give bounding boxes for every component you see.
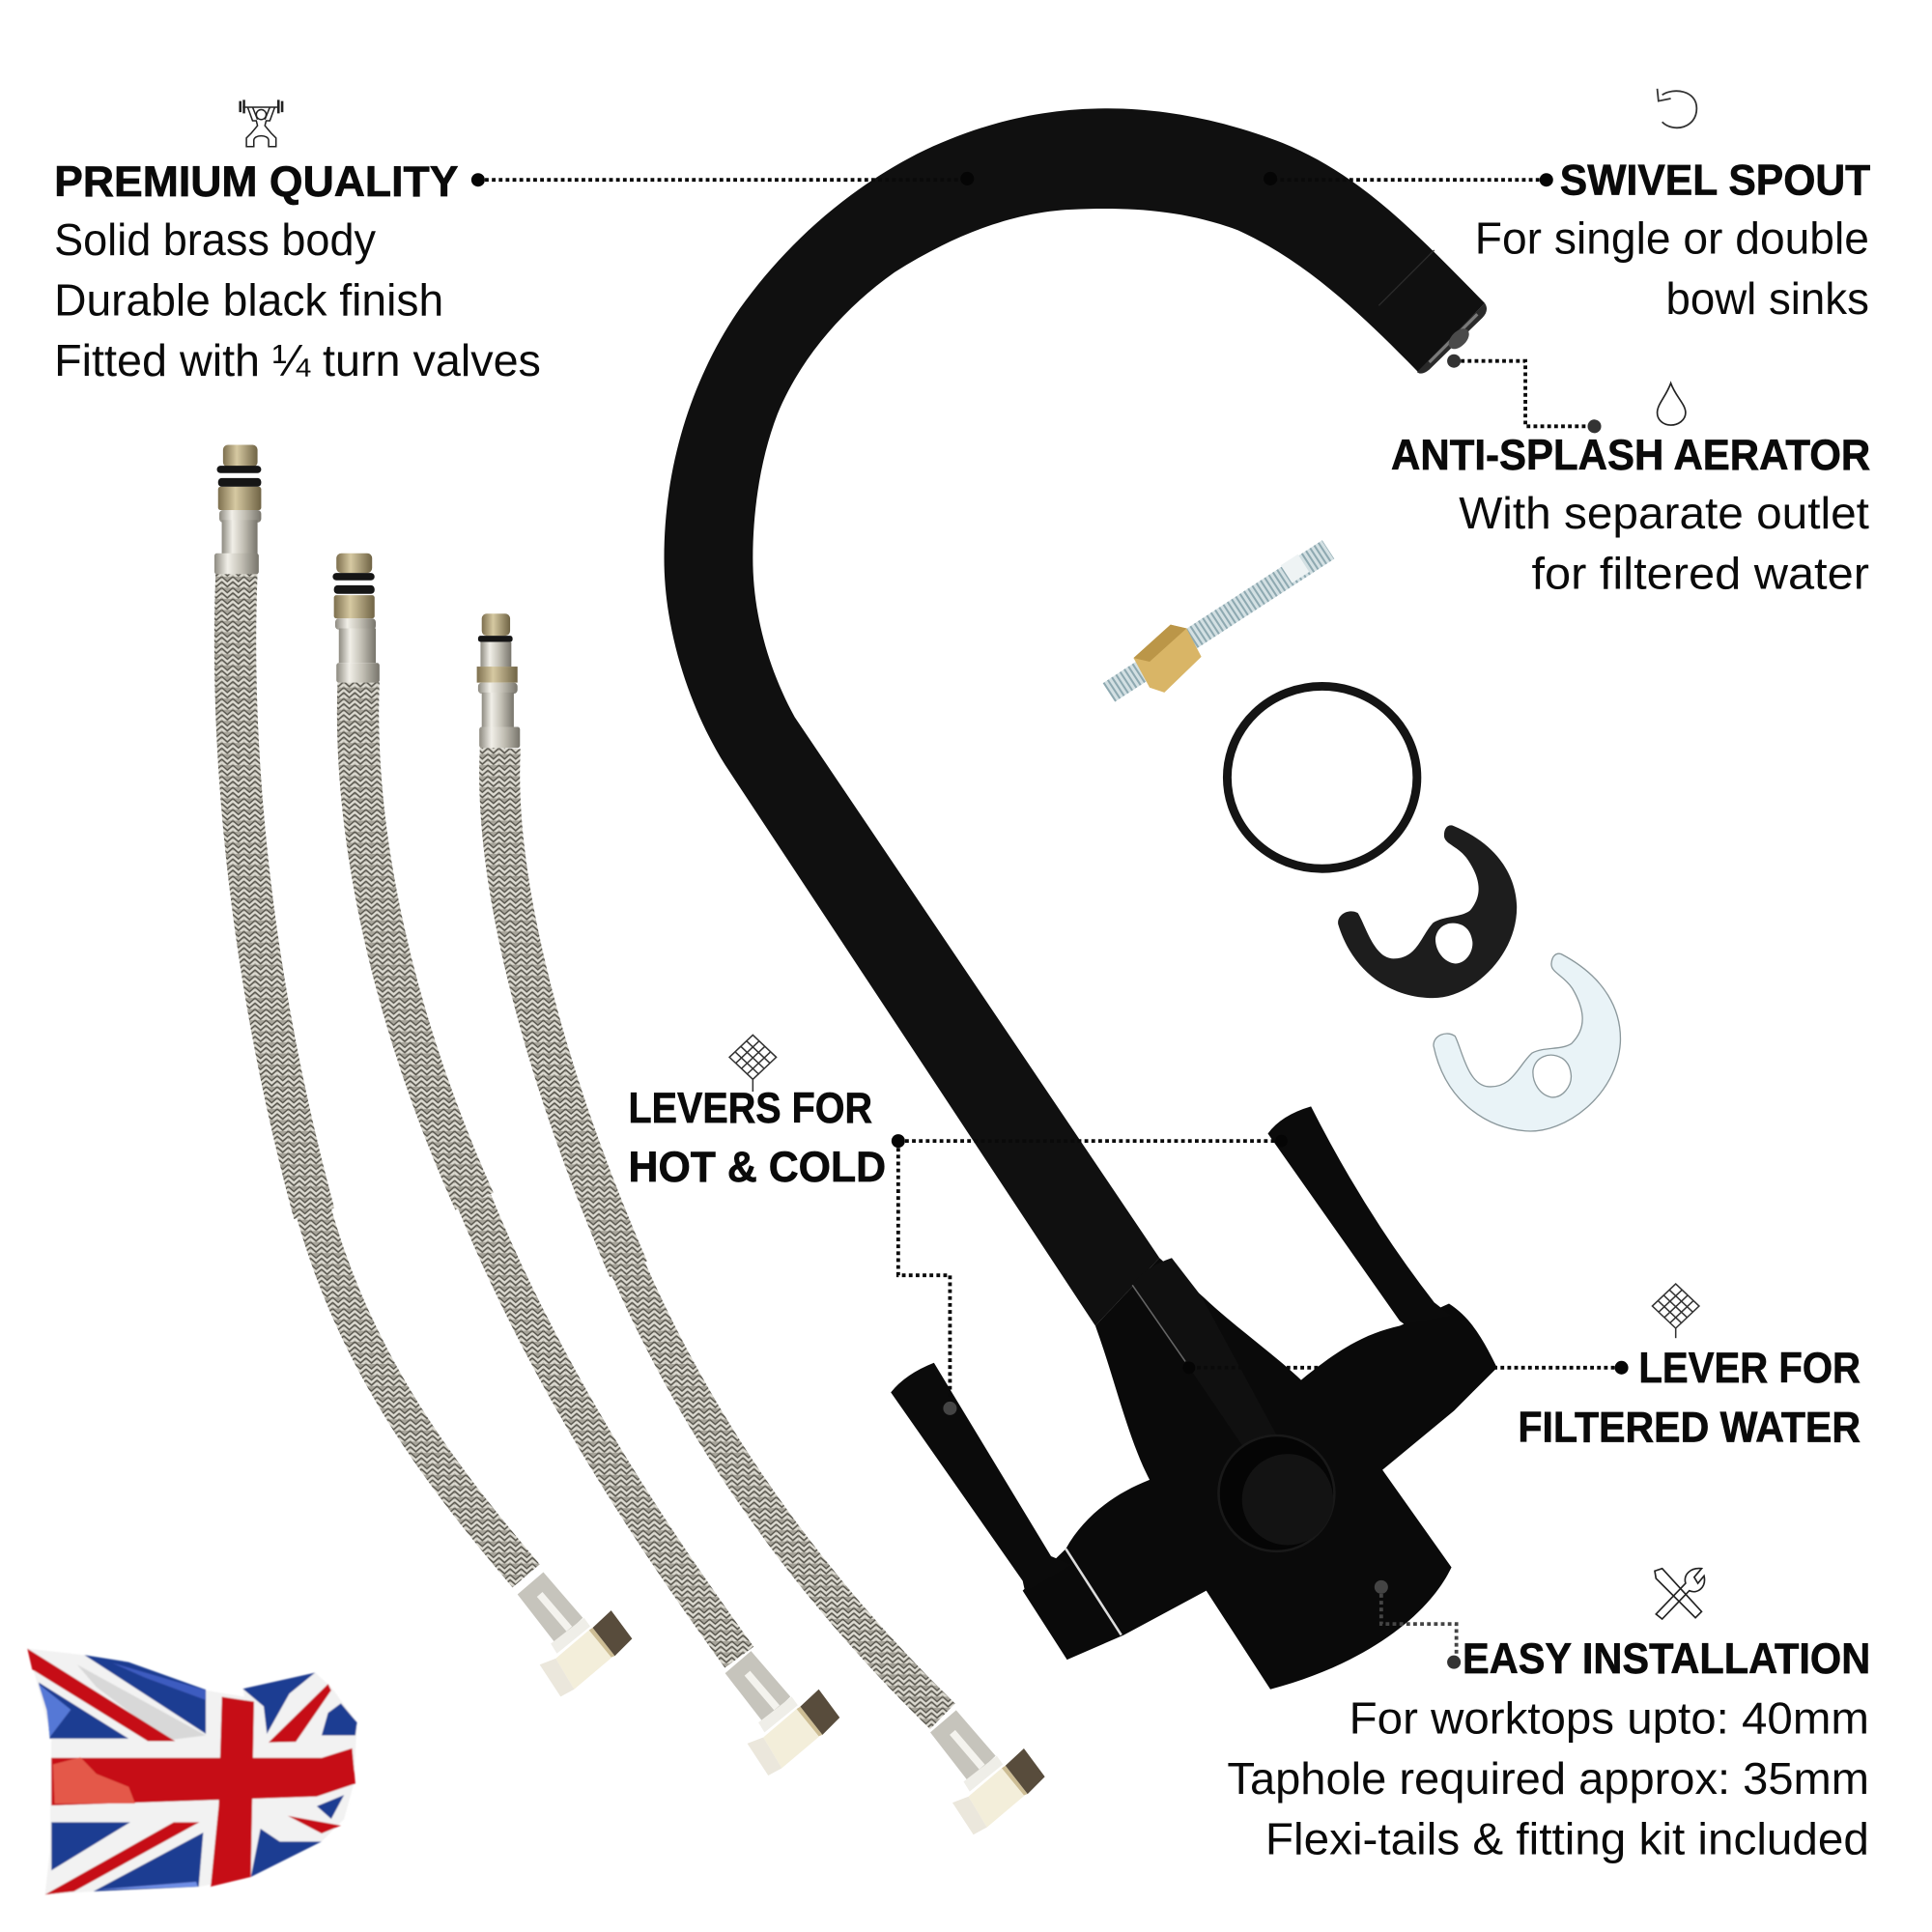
text: premium quality: Fitted with ¼ turn valves — [54, 335, 541, 385]
text: premium quality — [54, 158, 541, 385]
spout seam — [1378, 250, 1435, 305]
text: lever for filtered water: LEVER FOR — [1638, 1345, 1861, 1392]
flexi hose 2 — [332, 554, 839, 1776]
text: swivel spout: bowl sinks — [1665, 273, 1869, 324]
faucet — [665, 108, 1497, 1690]
text: easy installation — [1227, 1635, 1870, 1864]
text: swivel spout — [1475, 157, 1870, 324]
icon: rotate arrow — [1658, 89, 1696, 128]
centre lever — [1132, 1258, 1282, 1468]
callout lines — [478, 180, 1622, 1408]
flexi hose 3 — [477, 613, 1045, 1834]
body — [1023, 1258, 1497, 1690]
icon: water drop — [1658, 384, 1686, 425]
black clamp washer — [1338, 825, 1517, 998]
text: easy installation: For worktops upto: 40mm — [1350, 1693, 1869, 1744]
text: premium quality: PREMIUM QUALITY — [54, 158, 459, 206]
flexi hose 1 — [214, 444, 632, 1696]
icon: knot left — [729, 1035, 777, 1092]
text: swivel spout: For single or double — [1475, 213, 1869, 264]
text: levers for hot and cold: HOT & COLD — [629, 1144, 886, 1191]
stud bolt — [1109, 550, 1328, 693]
icon: knot right — [1652, 1284, 1699, 1338]
aerator — [1417, 303, 1487, 374]
text: easy installation: Flexi-tails & fitting kit included — [1265, 1814, 1869, 1864]
left lever — [891, 1363, 1072, 1592]
spout — [665, 108, 1485, 1325]
union jack flag — [27, 1649, 357, 1894]
icon: tools — [1655, 1569, 1704, 1619]
knob — [1218, 1435, 1334, 1551]
text: easy installation: Taphole required approx: 35mm — [1227, 1753, 1869, 1804]
text: anti-splash aerator: for filtered water — [1531, 549, 1869, 599]
icon: weightlifter — [241, 99, 282, 147]
right lever — [1267, 1106, 1452, 1324]
text: swivel spout: SWIVEL SPOUT — [1560, 157, 1870, 205]
text: levers for hot and cold: LEVERS FOR — [629, 1085, 872, 1132]
text: premium quality: Solid brass body — [54, 214, 376, 265]
text: lever for filtered water — [1518, 1345, 1861, 1451]
text: anti-splash aerator: With separate outlet — [1459, 488, 1869, 538]
text: anti-splash aerator — [1391, 432, 1870, 599]
text: lever for filtered water: FILTERED WATER — [1518, 1404, 1861, 1451]
text: levers for hot and cold — [629, 1085, 886, 1191]
zinc clamp washer — [1427, 944, 1628, 1139]
callout dots — [471, 172, 1629, 1415]
text: premium quality: Durable black finish — [54, 275, 443, 326]
text: easy installation: EASY INSTALLATION — [1463, 1635, 1870, 1683]
rubber o-ring — [1227, 686, 1417, 868]
cap seam — [1065, 1548, 1122, 1635]
text: anti-splash aerator: ANTI-SPLASH AERATOR — [1391, 432, 1870, 479]
easy installation connector — [1375, 1580, 1461, 1669]
